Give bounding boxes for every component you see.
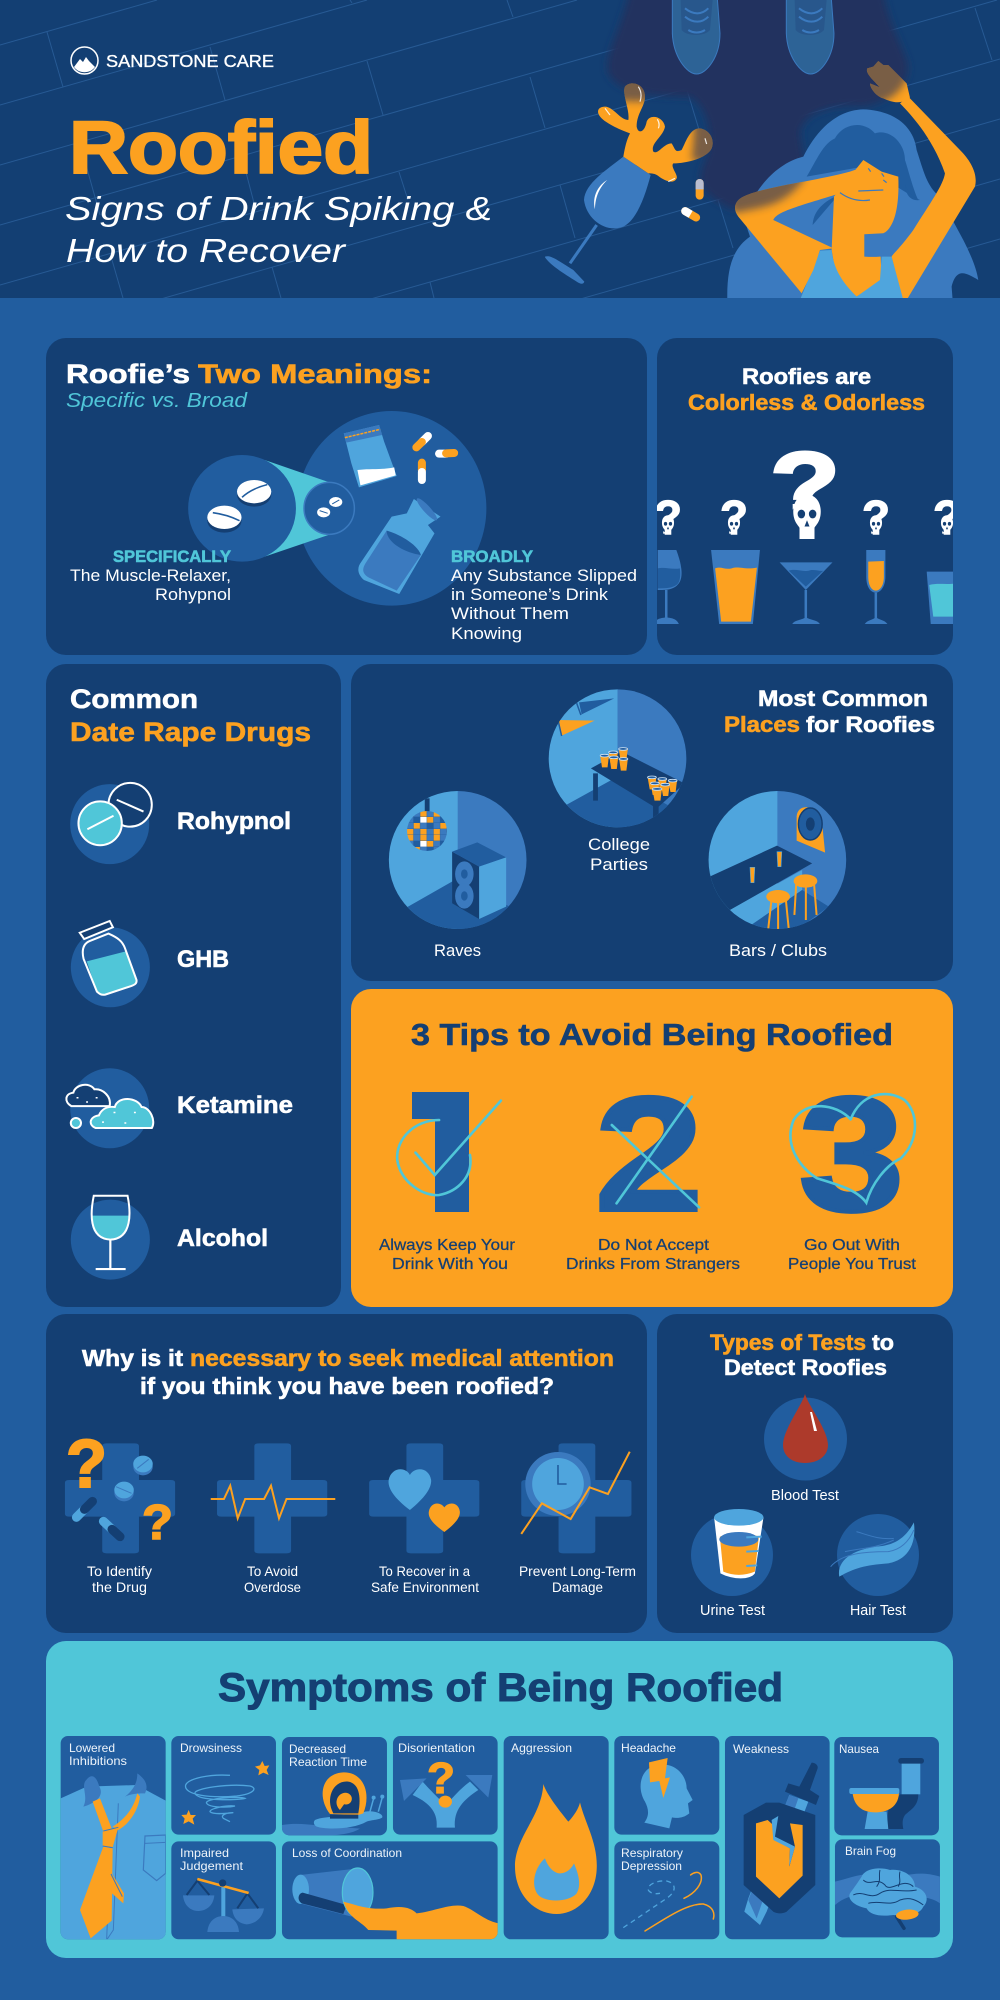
tile: disorientation: Disorientation <box>398 1741 475 1755</box>
logo: SANDSTONE CARE <box>106 51 274 71</box>
heading: Symptoms of Being Roofied <box>218 1666 783 1710</box>
label: Alcohol: Alcohol <box>177 1225 268 1252</box>
heading: Two Meanings: <box>198 359 432 389</box>
tile: brain fog: Brain Fog <box>845 1844 896 1858</box>
tile: lowered inhibitions <box>61 1736 166 1940</box>
subtitle: How to Recover <box>66 232 347 269</box>
heading: Roofie’s <box>66 359 190 389</box>
icon: identify the drug: the Drug <box>92 1579 147 1595</box>
tip 3: Go Out With <box>804 1237 900 1254</box>
tile: impaired judgement <box>171 1841 276 1939</box>
icon: question marks and skulls: ? <box>770 433 840 539</box>
subtitle: Signs of Drink Spiking & <box>65 190 492 227</box>
heading: Detect Roofies <box>724 1355 887 1380</box>
illustration: bars and clubs <box>707 790 848 937</box>
tile: respiratory depression: Depression <box>621 1859 682 1873</box>
icon: avoid overdose: Overdose <box>244 1579 301 1595</box>
label: Rohypnol: Rohypnol <box>177 808 291 835</box>
heading: 3 Tips to Avoid Being Roofied <box>411 1017 893 1052</box>
heading: necessary to seek medical attention <box>190 1345 614 1371</box>
panel: colorless and odorless <box>654 338 961 655</box>
heading: Types of Tests <box>710 1330 866 1355</box>
label: GHB: GHB <box>177 946 229 973</box>
panel: why seek medical attention <box>46 1314 647 1633</box>
icon: identify the drug: To Identify <box>87 1563 152 1579</box>
shadow over splash, hand and arm <box>624 61 908 218</box>
icon: identify the drug: ? <box>66 1426 107 1502</box>
tile: headache <box>614 1736 719 1835</box>
panel: common date rape drugs <box>46 664 341 1307</box>
icon: drink splash <box>598 83 713 182</box>
panel: three tips <box>351 989 953 1307</box>
tile: loss of coordination: Loss of Coordination <box>292 1846 402 1860</box>
subheading: Specific vs. Broad <box>66 390 248 412</box>
tile: decreased reaction time <box>282 1737 387 1837</box>
heading <box>66 359 432 389</box>
heading: to <box>872 1330 894 1355</box>
icon: row of glasses <box>654 550 956 624</box>
tip 1: 1 <box>399 1064 497 1245</box>
icon: blood test <box>764 1394 847 1504</box>
heading <box>82 1345 614 1399</box>
tile: respiratory depression: Respiratory <box>621 1846 683 1860</box>
panel: types of tests <box>657 1314 953 1633</box>
heading: Date Rape Drugs <box>70 717 311 747</box>
icon: question marks and skulls: ? <box>720 491 748 543</box>
heading: for Roofies <box>806 712 935 737</box>
text: broadly: Without Them <box>451 604 569 623</box>
icon: Alcohol wine glass <box>71 1196 150 1280</box>
label: college parties <box>588 835 650 874</box>
icon: Rohypnol pills <box>70 783 152 864</box>
icon: prevent long-term damage: Damage <box>552 1579 603 1595</box>
subtitle <box>66 196 490 262</box>
panel: most common places <box>351 664 953 981</box>
tip 2: Drinks From Strangers <box>566 1256 740 1273</box>
text: broadly <box>451 547 637 643</box>
heading: Roofies are <box>742 364 871 389</box>
icon: identify the drug: ? <box>142 1496 173 1550</box>
tile: decreased reaction time: Reaction Time <box>289 1755 367 1769</box>
icon: tipped wine glass <box>545 157 651 284</box>
label: college parties: College <box>588 835 650 854</box>
tip 1 <box>379 1064 515 1273</box>
icon: question marks and skulls <box>657 450 953 539</box>
heading: if you think you have been roofied? <box>140 1373 554 1399</box>
icon: prevent long-term damage: Prevent Long-Term <box>519 1563 636 1579</box>
illustration: woman, spilled glass, shadow <box>545 0 978 300</box>
heading <box>688 364 925 415</box>
label: raves: Raves <box>434 941 481 960</box>
label: bars and clubs: Bars / Clubs <box>729 941 827 960</box>
icon: capsules <box>416 436 454 480</box>
text: specifically: The Muscle-Relaxer, <box>70 566 231 585</box>
tile: weakness <box>725 1736 830 1939</box>
icon: avoid overdose <box>211 1443 335 1595</box>
icon: hair test: Hair Test <box>850 1603 906 1619</box>
tile: nausea: Nausea <box>839 1742 879 1756</box>
tip 2: Do Not Accept <box>598 1237 710 1254</box>
tile: impaired judgement: Judgement <box>180 1859 244 1873</box>
tip 2 <box>566 1064 740 1273</box>
title: Roofied <box>69 106 373 189</box>
figure: woman covering her eyes <box>727 61 978 300</box>
tile: aggression <box>504 1736 609 1939</box>
icon: right shoe <box>786 0 834 74</box>
tip 3 <box>788 1064 917 1273</box>
icon: recover in a safe environment <box>369 1443 479 1595</box>
tile: disorientation <box>393 1736 498 1835</box>
tile: lowered inhibitions: Lowered <box>69 1741 115 1755</box>
tile: aggression: Aggression <box>511 1741 572 1755</box>
tile: nausea <box>834 1737 939 1835</box>
illustration: college parties <box>548 687 688 830</box>
tip 1: Always Keep Your <box>379 1237 515 1254</box>
tile: drowsiness <box>171 1736 276 1835</box>
tile: brain fog <box>835 1839 940 1937</box>
tip 3: 3 <box>799 1064 904 1245</box>
icon: urine test <box>691 1509 773 1619</box>
icon: question marks and skulls: ? <box>862 491 890 543</box>
label: college parties: Parties <box>590 855 648 874</box>
text: specifically <box>70 547 232 604</box>
tip 3: People You Trust <box>788 1256 917 1273</box>
tile: weakness: Weakness <box>733 1742 789 1756</box>
tile: decreased reaction time: Decreased <box>289 1742 346 1756</box>
icon: recover in a safe environment: Safe Environment <box>371 1579 479 1595</box>
icon: urine test: Urine Test <box>700 1603 765 1619</box>
heading: Why is it <box>82 1345 183 1371</box>
text: broadly: BROADLY <box>451 547 534 566</box>
text: broadly: Knowing <box>451 624 522 643</box>
heading: Colorless & Odorless <box>688 390 925 415</box>
icon: hair test <box>831 1514 919 1619</box>
icon: capsules <box>680 179 704 223</box>
icon: avoid overdose: To Avoid <box>247 1563 298 1579</box>
tile: respiratory depression <box>614 1841 719 1939</box>
logo <box>71 47 274 74</box>
label: Ketamine: Ketamine <box>177 1092 293 1119</box>
tile: loss of coordination <box>282 1841 498 1940</box>
text: broadly: Any Substance Slipped <box>451 566 637 585</box>
icon: question marks and skulls: ? <box>933 491 961 543</box>
icon: left shoe <box>672 0 720 74</box>
illustration: raves <box>388 790 528 930</box>
tile: lowered inhibitions: Inhibitions <box>69 1754 127 1768</box>
tip 1: Drink With You <box>392 1256 508 1273</box>
heading <box>724 686 935 737</box>
heading: Places <box>724 712 800 737</box>
heading: Most Common <box>758 686 928 711</box>
text: specifically: SPECIFICALLY <box>113 547 232 566</box>
heading <box>710 1330 894 1380</box>
panel: Roofie's two meanings <box>46 338 647 655</box>
icon: Ketamine powder clouds <box>66 1068 153 1148</box>
heading: Common <box>70 684 198 714</box>
illustration: magnified pills <box>188 411 486 606</box>
shadow <box>607 0 908 210</box>
icon: prevent long-term damage <box>519 1443 636 1595</box>
icon: bottle <box>358 497 441 594</box>
icon: recover in a safe environment: To Recover in a <box>379 1563 470 1579</box>
tile: drowsiness: Drowsiness <box>180 1741 242 1755</box>
panel: symptoms of being roofied <box>46 1641 953 1958</box>
tip 2: 2 <box>595 1064 703 1245</box>
heading <box>70 684 311 747</box>
icon: baggie of powder <box>344 425 397 487</box>
tile: impaired judgement: Impaired <box>180 1846 229 1860</box>
icon: GHB bottle <box>71 921 150 1007</box>
icon: identify the drug <box>65 1426 175 1595</box>
text: specifically: Rohypnol <box>155 585 231 604</box>
tile: disorientation: ? <box>427 1754 455 1803</box>
tile: headache: Headache <box>621 1741 676 1755</box>
text: broadly: in Someone’s Drink <box>451 585 609 604</box>
header banner <box>0 0 1000 298</box>
icon: blood test: Blood Test <box>771 1488 839 1504</box>
icon: question marks and skulls: ? <box>654 491 682 543</box>
